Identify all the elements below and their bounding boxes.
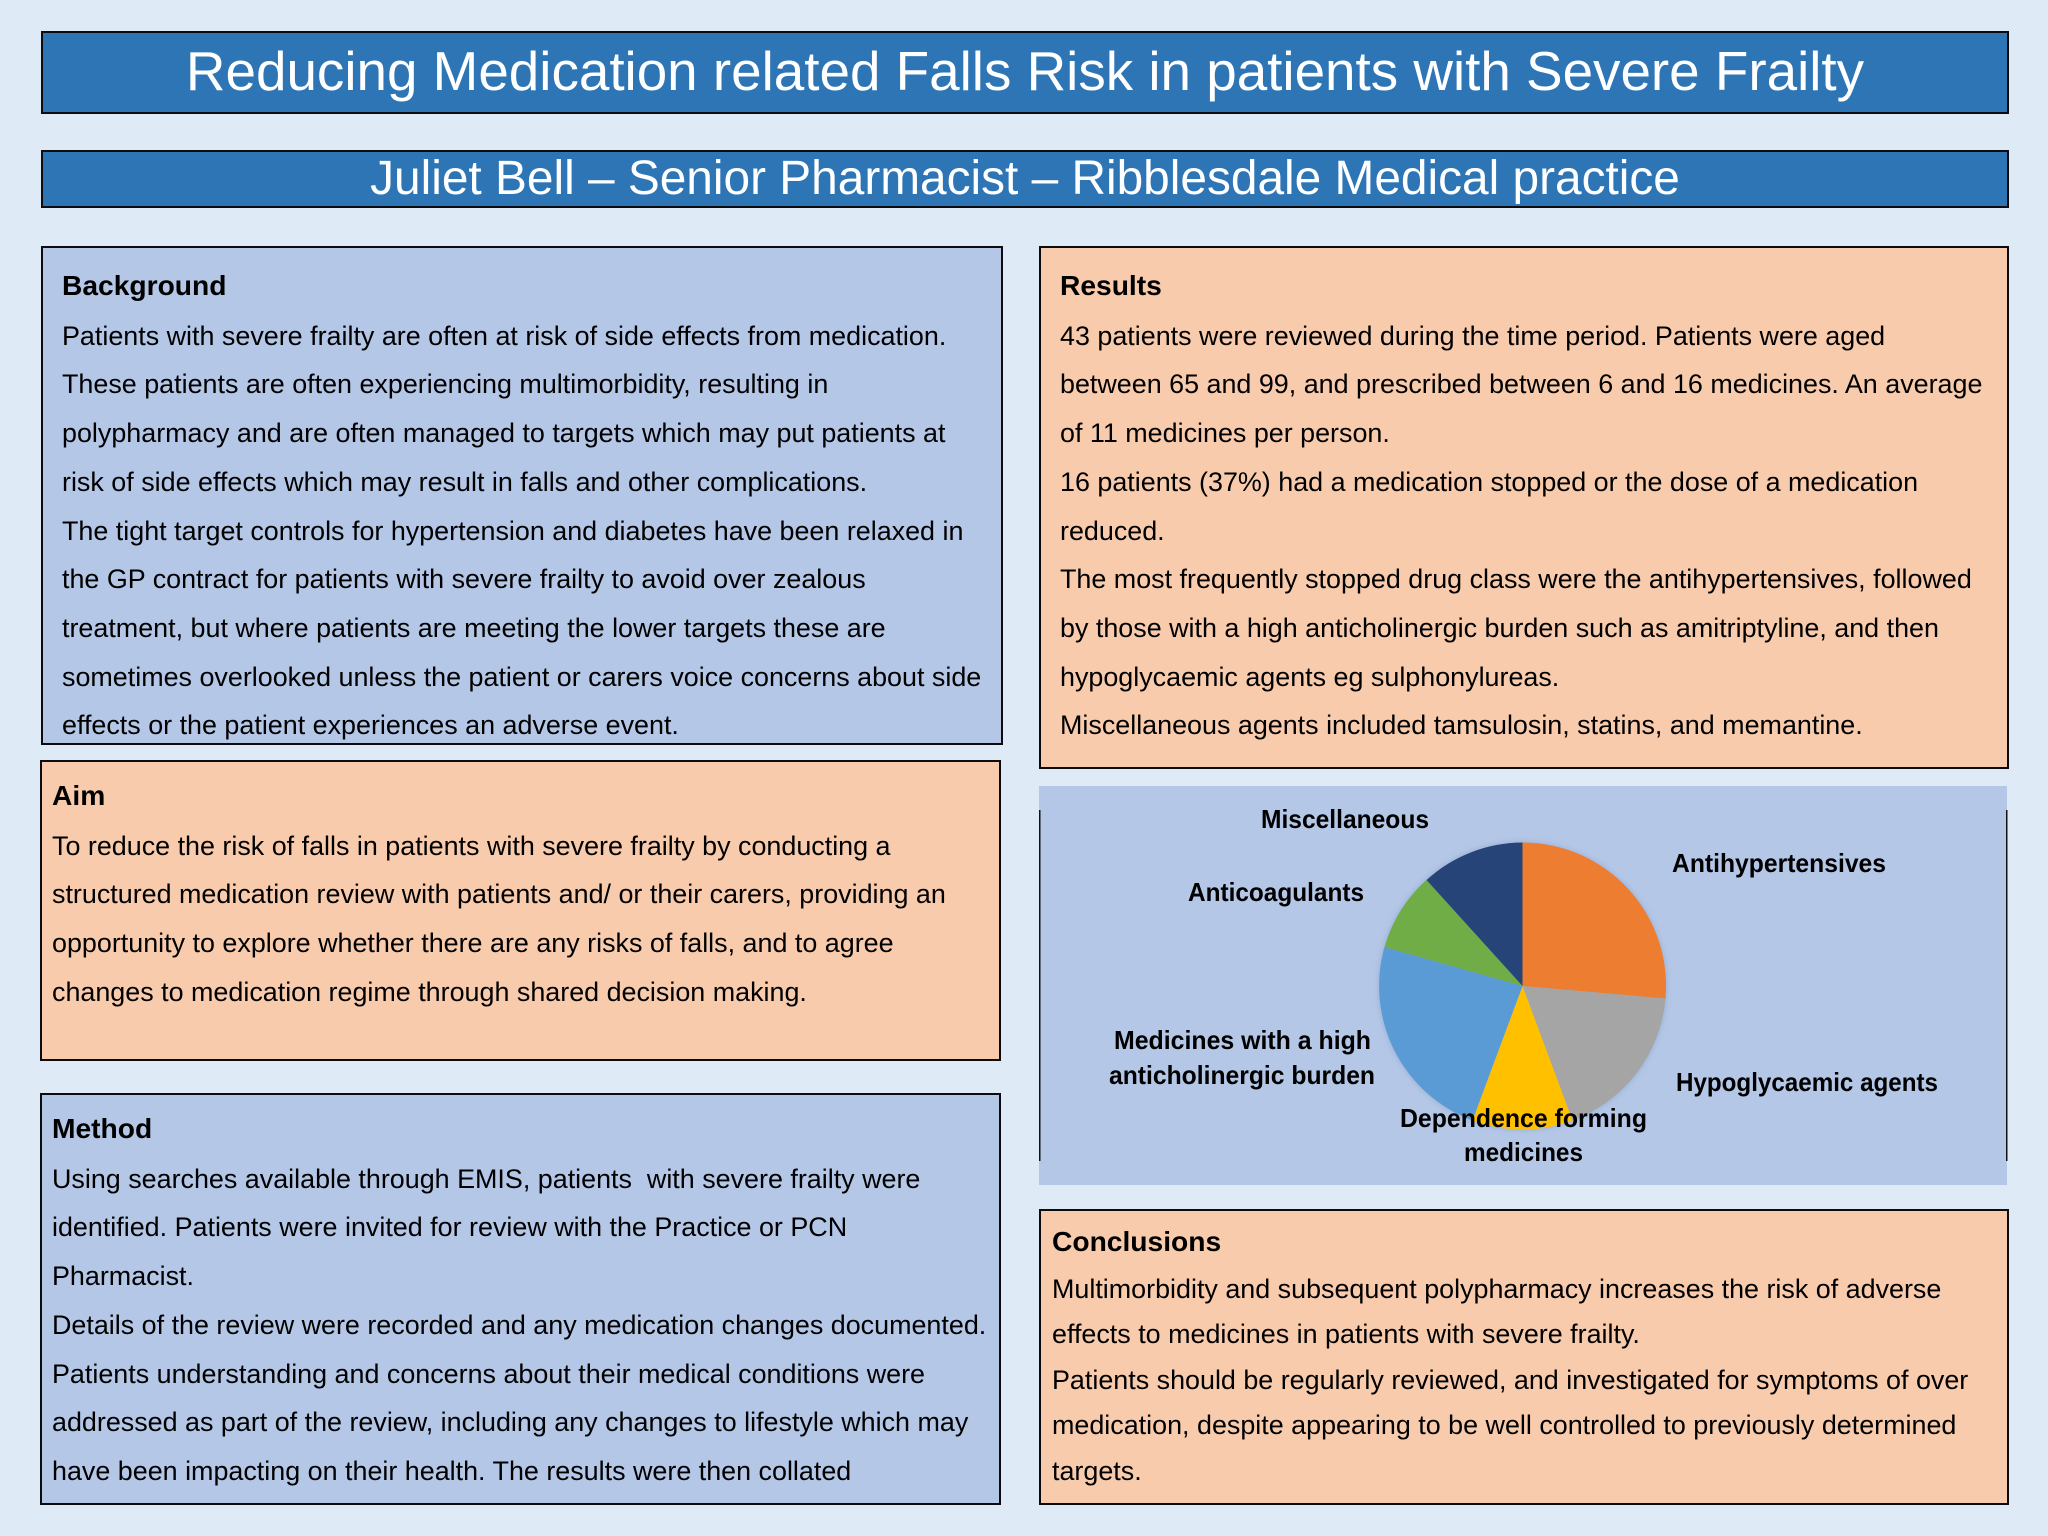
- results text: [1060, 269, 1982, 740]
- method text: addressed as part of the review, including any changes to lifestyle which may: [52, 1407, 968, 1437]
- conclusions text: Patients should be regularly reviewed, and investigated for symptoms of over: [1052, 1364, 1968, 1394]
- author banner: Juliet Bell – Senior Pharmacist – Ribblesdale Medical practice: [370, 152, 1680, 205]
- pie labels: Medicines with a high: [1114, 1025, 1371, 1055]
- method text: Method: [52, 1112, 152, 1144]
- pie labels: [1109, 804, 1938, 1167]
- author banner: [41, 150, 2009, 208]
- pie labels: Anticoagulants: [1188, 877, 1364, 907]
- method text: Patients understanding and concerns about their medical conditions were: [52, 1359, 925, 1389]
- conclusions text: medication, despite appearing to be well controlled to previously determined: [1052, 1410, 1956, 1440]
- title banner: Reducing Medication related Falls Risk in patients with Severe Frailty: [186, 40, 1864, 102]
- results text: The most frequently stopped drug class were the antihypertensives, followed: [1060, 564, 1972, 594]
- pie labels: Miscellaneous: [1261, 804, 1429, 834]
- results text: Results: [1060, 269, 1162, 301]
- background text: These patients are often experiencing multimorbidity, resulting in: [62, 369, 828, 399]
- pie labels: Hypoglycaemic agents: [1676, 1067, 1938, 1097]
- background text: sometimes overlooked unless the patient or carers voice concerns about side: [62, 662, 981, 692]
- background text: The tight target controls for hypertension and diabetes have been relaxed in: [62, 516, 963, 546]
- results text: between 65 and 99, and prescribed between 6 and 16 medicines. An average: [1060, 369, 1982, 399]
- pie labels: anticholinergic burden: [1109, 1060, 1375, 1090]
- panel: results: [1039, 246, 2009, 769]
- method text: [52, 1112, 986, 1486]
- method text: identified. Patients were invited for review with the Practice or PCN: [52, 1212, 847, 1242]
- panel: aim: [40, 760, 1001, 1061]
- results text: hypoglycaemic agents eg sulphonylureas.: [1060, 662, 1559, 692]
- conclusions text: [1052, 1225, 1968, 1486]
- background text: polypharmacy and are often managed to targets which may put patients at: [62, 418, 945, 448]
- background text: risk of side effects which may result in falls and other complications.: [62, 467, 867, 497]
- results text: by those with a high anticholinergic burden such as amitriptyline, and then: [1060, 613, 1939, 643]
- panel: background: [41, 246, 1003, 745]
- pie labels: medicines: [1464, 1137, 1583, 1167]
- pie slices: [1379, 842, 1666, 1129]
- pie labels: Antihypertensives: [1672, 848, 1886, 878]
- aim text: structured medication review with patients and/ or their carers, providing an: [52, 879, 946, 909]
- background text: Background: [62, 269, 226, 301]
- results text: 43 patients were reviewed during the time period. Patients were aged: [1060, 321, 1885, 351]
- background text: [62, 269, 981, 740]
- results text: 16 patients (37%) had a medication stopped or the dose of a medication: [1060, 467, 1918, 497]
- conclusions text: targets.: [1052, 1456, 1142, 1486]
- results text: reduced.: [1060, 516, 1165, 546]
- results text: of 11 medicines per person.: [1060, 418, 1390, 448]
- pie labels: Dependence forming: [1400, 1103, 1647, 1133]
- background text: treatment, but where patients are meeting the lower targets these are: [62, 613, 886, 643]
- conclusions text: Multimorbidity and subsequent polypharmacy increases the risk of adverse: [1052, 1274, 1941, 1304]
- results text: Miscellaneous agents included tamsulosin, statins, and memantine.: [1060, 710, 1863, 740]
- aim text: To reduce the risk of falls in patients with severe frailty by conducting a: [52, 831, 891, 861]
- method text: Using searches available through EMIS, patients with severe frailty were: [52, 1164, 920, 1194]
- method text: Details of the review were recorded and any medication changes documented.: [52, 1310, 986, 1340]
- panel: method: [40, 1093, 1001, 1505]
- background text: the GP contract for patients with severe frailty to avoid over zealous: [62, 564, 866, 594]
- method text: have been impacting on their health. The results were then collated: [52, 1456, 851, 1486]
- aim text: [52, 779, 946, 1007]
- title banner: [41, 31, 2009, 114]
- aim text: opportunity to explore whether there are any risks of falls, and to agree: [52, 928, 894, 958]
- method text: Pharmacist.: [52, 1261, 194, 1291]
- conclusions text: effects to medicines in patients with severe frailty.: [1052, 1319, 1640, 1349]
- aim text: Aim: [52, 779, 105, 811]
- aim text: changes to medication regime through shared decision making.: [52, 977, 807, 1007]
- background text: effects or the patient experiences an adverse event.: [62, 710, 679, 740]
- panel: conclusions: [1039, 1209, 2009, 1505]
- background text: Patients with severe frailty are often at risk of side effects from medication.: [62, 321, 946, 351]
- conclusions text: Conclusions: [1052, 1225, 1221, 1257]
- panel: pie chart: [1039, 786, 2008, 1185]
